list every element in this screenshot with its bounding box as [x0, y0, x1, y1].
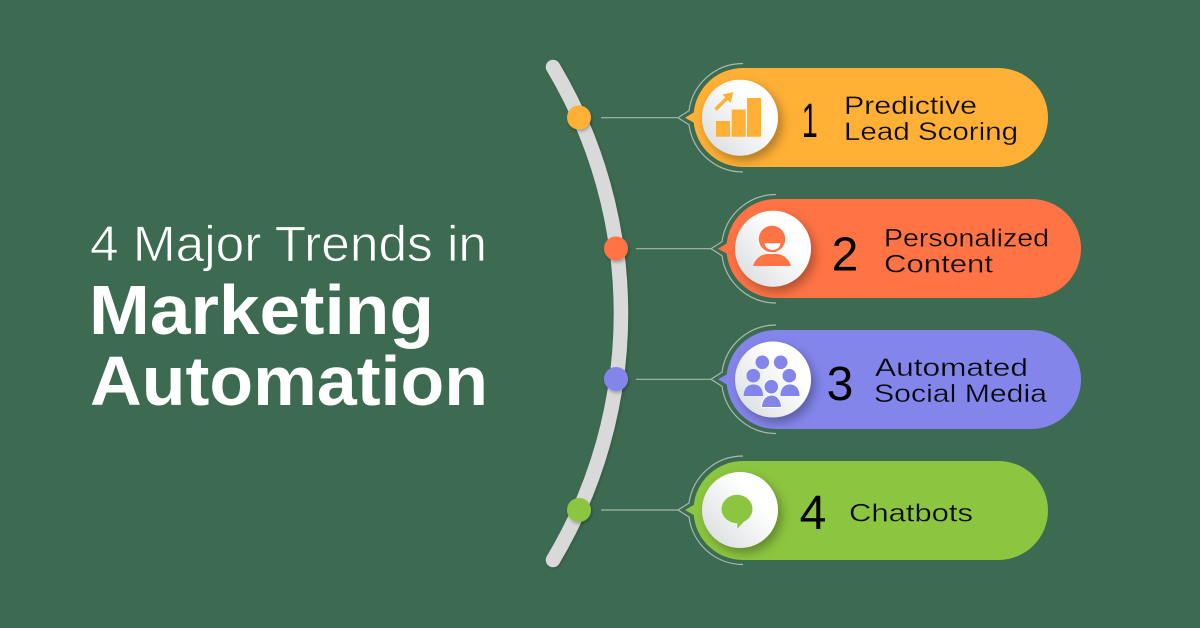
label 2: Personalized: [884, 225, 1049, 253]
number 3: 3: [827, 358, 853, 411]
title: [89, 216, 488, 420]
label 2: [884, 225, 1049, 279]
pill 2: [718, 199, 1081, 298]
item 3: automated social media: [604, 325, 1081, 434]
connector 1: [601, 64, 743, 172]
item 4: chatbots: [567, 456, 1048, 564]
icon: group of people: [735, 342, 811, 418]
label 1: Lead Scoring: [844, 118, 1018, 146]
marker dot 4: [567, 498, 591, 522]
pill 3: [718, 330, 1081, 429]
pill 1: [685, 68, 1048, 167]
curved timeline track: [553, 67, 621, 560]
pill 4: [685, 461, 1048, 560]
label 3: Automated: [875, 354, 1028, 382]
item 1: predictive lead scoring: [567, 64, 1048, 172]
item 2: personalized content: [604, 194, 1081, 303]
icon: chat bubble: [702, 472, 778, 548]
icon: bar chart with rising arrow: [702, 80, 778, 156]
icon: smiling person: [735, 211, 811, 287]
label 3: Social Media: [874, 380, 1047, 408]
connector 2: [636, 194, 776, 303]
connector 3: [636, 325, 776, 434]
label 3: [874, 354, 1047, 408]
title: Automation: [90, 342, 488, 420]
marker dot 3: [604, 367, 628, 391]
number 1: 1: [802, 95, 818, 148]
number 2: 2: [832, 229, 858, 282]
title: 4 Major Trends in: [90, 216, 487, 272]
label 1: Predictive: [844, 92, 977, 120]
label 1: [844, 92, 1018, 146]
connector 4: [601, 456, 743, 564]
number 4: 4: [800, 487, 826, 540]
title: Marketing: [89, 271, 434, 349]
marker dot 1: [567, 106, 591, 130]
marker dot 2: [604, 236, 628, 260]
label 2: Content: [884, 251, 993, 279]
label 4: Chatbots: [849, 500, 973, 528]
